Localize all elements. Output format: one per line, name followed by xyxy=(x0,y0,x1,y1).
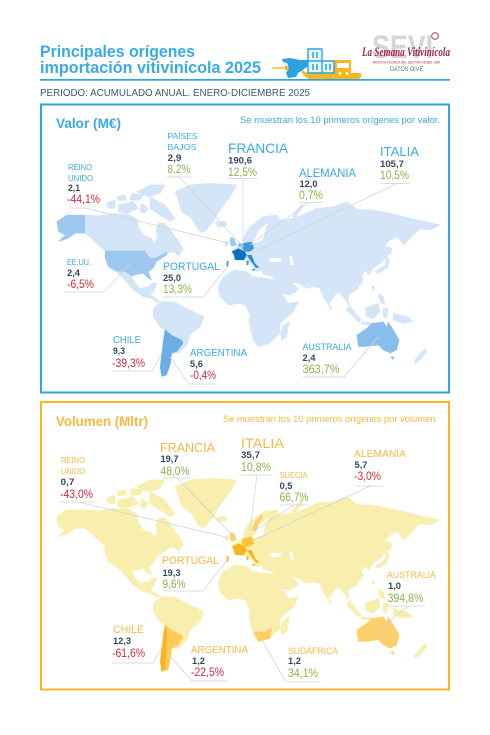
label: Argentina xyxy=(168,644,248,681)
label: Alemania: 5,7 xyxy=(354,460,368,470)
label: Francia xyxy=(160,440,237,540)
title xyxy=(40,42,261,77)
label: Sudáfrica: SUDÁFRICA xyxy=(288,646,339,657)
label: Portugal: 9,6% xyxy=(162,578,186,591)
panel: volumen xyxy=(41,402,449,690)
label: Chile: 12,3 xyxy=(113,636,131,646)
label: Chile: -61,6% xyxy=(112,647,145,660)
label: Reino Unido xyxy=(67,162,228,243)
label: Reino Unido: 2,1 xyxy=(68,183,80,193)
label: Portugal: PORTUGAL xyxy=(163,261,220,273)
label: Argentina: ARGENTINA xyxy=(190,347,247,359)
label: Sudáfrica xyxy=(262,640,339,682)
label: Chile: 9,3 xyxy=(113,346,125,356)
label: Países Bajos: BAJOS xyxy=(168,142,197,152)
label: Chile: CHILE xyxy=(113,335,141,346)
label: Países Bajos: 2,9 xyxy=(168,153,182,163)
label: EE.UU. xyxy=(64,257,131,292)
label: Australia: 363,7% xyxy=(302,363,340,376)
subtitle: period: PERIODO: ACUMULADO ANUAL. ENERO-DICIEMBRE 2025 xyxy=(40,88,310,99)
label: Argentina: 5,6 xyxy=(190,359,203,369)
label: Francia: FRANCIA xyxy=(228,140,289,156)
label: Suecia: SUECIA xyxy=(280,471,308,480)
label: Portugal xyxy=(162,555,227,591)
label: Portugal: PORTUGAL xyxy=(162,555,219,567)
label: Italia xyxy=(252,144,419,253)
logo: La Semana Vitivinícola SEVI: DATOS OIVE xyxy=(390,67,423,73)
label: Reino Unido: UNIDO xyxy=(68,173,93,183)
label: Argentina xyxy=(170,347,247,384)
label: Italia: 10,5% xyxy=(380,169,409,182)
map: volumen xyxy=(57,478,440,672)
logo: La Semana Vitivinícola SEVI: SEVI xyxy=(372,29,433,65)
label: Portugal: 25,0 xyxy=(163,273,181,283)
label: Reino Unido: -44,1% xyxy=(67,193,100,206)
label: Reino Unido: REINO xyxy=(61,455,85,465)
label: EE.UU.: -6,5% xyxy=(67,278,94,291)
label: Francia: 190,6 xyxy=(228,156,252,166)
label: Alemania xyxy=(250,448,406,542)
label: Suecia xyxy=(255,471,308,530)
label: Reino Unido: REINO xyxy=(68,162,92,172)
note: valor: Se muestran los 10 primeros orígenes por valor. xyxy=(240,115,440,125)
label: Australia: 394,8% xyxy=(388,592,424,605)
label: Chile: -39,3% xyxy=(112,357,145,370)
note: volumen: Se muestran los 10 primeros orígenes por volumen. xyxy=(223,414,438,424)
label: Países Bajos: PAÍSES xyxy=(168,131,198,141)
title: importación vitivinícola 2025 xyxy=(40,58,261,77)
label: Australia xyxy=(378,570,437,631)
label: Australia xyxy=(302,337,378,377)
label: Argentina: -22,5% xyxy=(191,666,224,679)
label: Alemania: -3,0% xyxy=(354,470,381,483)
label: Reino Unido xyxy=(60,455,230,538)
heading: volumen: Volumen (Mltr) xyxy=(56,414,148,429)
label: Chile xyxy=(112,335,162,371)
map: valor xyxy=(57,183,440,377)
label: Italia: ITALIA xyxy=(241,435,285,451)
label: Portugal: 13,3% xyxy=(163,283,192,296)
label: Australia: 2,4 xyxy=(302,353,316,363)
label: Países Bajos: 8,2% xyxy=(168,163,190,176)
label: Italia: 35,7 xyxy=(241,450,260,460)
label: Sudáfrica: 1,2 xyxy=(288,656,301,666)
label: Italia xyxy=(241,435,285,530)
label: Chile xyxy=(112,624,162,663)
label: Argentina: -0,4% xyxy=(190,369,216,382)
panel: valor xyxy=(41,104,449,392)
label: Suecia: 0,5 xyxy=(280,481,292,491)
label: Argentina: ARGENTINA xyxy=(191,644,248,656)
label: Reino Unido: -43,0% xyxy=(60,488,93,501)
label: Francia: FRANCIA xyxy=(160,440,215,455)
label: Reino Unido: UNIDO xyxy=(61,466,85,476)
label: Sudáfrica: 34,1% xyxy=(288,667,318,680)
label: EE.UU.: EE.UU. xyxy=(67,257,91,267)
label: Alemania xyxy=(250,168,356,245)
label: Italia: ITALIA xyxy=(380,144,419,159)
label: Australia: AUSTRALIA xyxy=(387,570,437,581)
label: Portugal: 19,3 xyxy=(162,568,180,578)
icon: ship importing to Spain xyxy=(272,49,361,79)
label: Australia: AUSTRALIA xyxy=(302,342,352,353)
label: Francia: 48,0% xyxy=(160,465,190,478)
label: Francia: 19,7 xyxy=(160,454,178,464)
logo: La Semana Vitivinícola SEVI: REVISTA TÉCNICA DEL SECTOR DESDE 1945 xyxy=(373,60,440,64)
label: Alemania: ALEMANIA xyxy=(354,448,406,460)
label: Países Bajos xyxy=(167,131,243,247)
title: Principales orígenes xyxy=(40,42,195,61)
label: Alemania: 0,7% xyxy=(299,189,323,202)
label: Reino Unido: 0,7 xyxy=(60,477,74,487)
label: Alemania: ALEMANIA xyxy=(299,168,356,180)
label: Francia: 12,5% xyxy=(228,166,257,179)
label: Francia xyxy=(228,140,289,250)
logo: La Semana Vitivinícola SEVI xyxy=(361,29,450,73)
heading: valor: Valor (M€) xyxy=(56,116,121,131)
label: Portugal xyxy=(163,261,227,297)
label: EE.UU.: 2,4 xyxy=(67,268,81,278)
label: Chile: CHILE xyxy=(113,624,144,636)
label: Italia: 10,8% xyxy=(241,461,271,474)
label: Italia: 105,7 xyxy=(380,159,404,169)
label: Suecia: 66,7% xyxy=(280,491,308,504)
label: Australia: 1,0 xyxy=(388,581,401,591)
label: Alemania: 12,0 xyxy=(300,179,318,189)
label: Argentina: 1,2 xyxy=(192,656,205,666)
logo: La Semana Vitivinícola SEVI: La Semana Vitivinícola xyxy=(361,45,450,59)
